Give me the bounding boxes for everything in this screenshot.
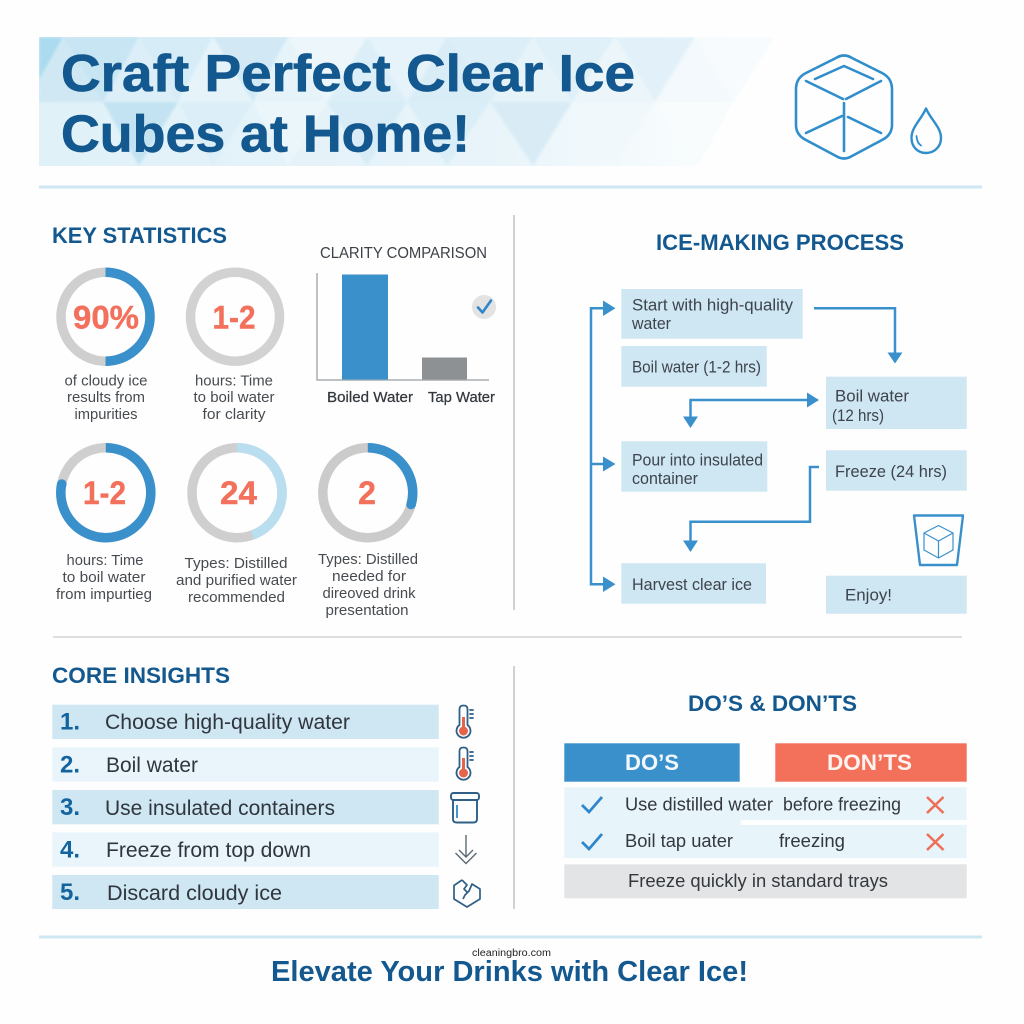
step: harvest clear ice: Harvest clear ice [632, 575, 752, 594]
comparison row 1 [564, 787, 967, 825]
heading: do's and don'ts: DO’S & DON’TS [688, 691, 857, 716]
step: enjoy [826, 576, 967, 614]
insight 3: Use insulated containers [105, 796, 335, 820]
icon: water drop [912, 108, 941, 153]
comparison row 3 [564, 864, 967, 898]
icon: check badge [472, 295, 496, 319]
stat: 2: Types: Distilled [318, 551, 418, 568]
stat: 2: needed for [332, 568, 406, 585]
bar chart: clarity comparison: Tap Water [428, 389, 495, 406]
don'ts header: DON’TS [827, 750, 912, 775]
heading: core insights: CORE INSIGHTS [52, 663, 230, 688]
insight 5: Discard cloudy ice [107, 881, 282, 905]
icon: thermometer [457, 748, 473, 780]
step: start with high-quality water: Start with high-quality [632, 296, 793, 315]
stat: 90%: results from [67, 389, 145, 406]
stat: 24: 24 [220, 475, 257, 511]
do's header [564, 743, 740, 782]
icon: down arrow [456, 835, 476, 864]
insight 2: Boil water [106, 753, 198, 777]
comparison row 3: Freeze quickly in standard trays [628, 871, 888, 891]
source label: cleaningbro.com [472, 948, 551, 959]
insight 1: Choose high-quality water [105, 710, 350, 734]
stat: 2: 2 [358, 475, 376, 511]
arrow: left feedback rail [591, 300, 616, 592]
bar chart: clarity comparison [317, 245, 495, 406]
step: pour into insulated container [621, 441, 767, 492]
stat: 24: Types: Distilled [184, 555, 288, 572]
stat: 2: direoved drink [322, 585, 416, 602]
stat: 24: and purified water [176, 572, 297, 589]
stat: 1-2 hours: to boil water [194, 389, 275, 406]
icon: insulated container [451, 793, 479, 822]
icon: ice cube [796, 56, 892, 158]
don'ts header [775, 743, 967, 782]
comparison row 2: Boil tap uater [625, 831, 733, 851]
stat: 24: recommended [188, 589, 285, 606]
stat: 90% [61, 272, 150, 423]
step: boil water 1-2 hrs [621, 346, 767, 387]
stat: 90%: 90% [73, 300, 139, 336]
insight 5 [52, 875, 439, 909]
stat: 2 [318, 448, 418, 619]
comparison row 1: Use distilled water [625, 795, 773, 815]
step: pour into insulated container: container [632, 469, 698, 488]
step: pour into insulated container: Pour into insulated [632, 451, 763, 470]
title: Cubes at Home! [61, 106, 470, 164]
divider [39, 186, 982, 188]
title [61, 45, 635, 164]
bar chart: clarity comparison: Boiled Water [327, 389, 413, 406]
step: boil water 12 hrs: (12 hrs) [832, 406, 884, 425]
arrow: freeze to harvest [683, 467, 819, 552]
step: start with high-quality water: water [631, 314, 671, 333]
stat: 1-2 hours, impurities: from impurtieg [56, 586, 152, 603]
heading: key statistics: KEY STATISTICS [52, 223, 227, 248]
stat: 24 [176, 448, 297, 606]
comparison row 2: freezing [779, 831, 845, 851]
stat: 1-2 hours [190, 272, 280, 423]
comparison row 1: before freezing [783, 795, 901, 815]
arrow: start to boil [814, 308, 902, 364]
step: boil water 12 hrs: Boil water [835, 387, 909, 406]
insight 2 [52, 747, 439, 782]
insight 3 [52, 790, 439, 824]
icon: cracked ice [454, 880, 480, 907]
bar chart: clarity comparison: CLARITY COMPARISON [320, 245, 487, 262]
stat: 2: presentation [326, 602, 408, 619]
stat: 1-2 hours: 1-2 [212, 300, 256, 336]
do's header: DO’S [625, 750, 679, 775]
insight 5: 5. [60, 879, 80, 906]
insight 1 [52, 705, 439, 739]
insight 4 [52, 832, 439, 867]
stat: 90%: of cloudy ice [64, 372, 148, 390]
stat: 1-2 hours: for clarity [202, 406, 266, 423]
header banner [39, 37, 775, 166]
step: boil water 1-2 hrs: Boil water (1-2 hrs) [632, 358, 761, 377]
stat: 1-2 hours: hours: Time [195, 372, 273, 390]
insight 2: 2. [60, 752, 80, 778]
arrow: boil to pour [683, 392, 819, 428]
stat: 90%: impurities [74, 406, 138, 423]
stat: 1-2 hours, impurities: 1-2 [83, 475, 126, 511]
title: Craft Perfect Clear Ice [61, 45, 635, 103]
step: enjoy: Enjoy! [845, 586, 892, 605]
insight 1: 1. [60, 708, 80, 736]
step: start with high-quality water [621, 289, 803, 339]
stat: 1-2 hours, impurities: hours: Time [66, 552, 144, 569]
icon: thermometer [457, 706, 473, 738]
step: boil water 12 hrs [826, 377, 967, 429]
icon: glass with ice cube [914, 516, 963, 565]
stat: 1-2 hours, impurities [56, 448, 152, 603]
heading: ice-making process: ICE-MAKING PROCESS [656, 230, 904, 255]
step: freeze 24 hrs: Freeze (24 hrs) [835, 462, 947, 481]
insight 4: 4. [60, 836, 80, 864]
step: harvest clear ice [621, 563, 766, 604]
step: freeze 24 hrs [826, 450, 967, 491]
insight 3: 3. [60, 794, 80, 821]
comparison row 2 [564, 825, 967, 858]
insight 4: Freeze from top down [106, 838, 311, 862]
footer tagline: Elevate Your Drinks with Clear Ice! [271, 956, 748, 988]
stat: 1-2 hours, impurities: to boil water [62, 569, 146, 586]
